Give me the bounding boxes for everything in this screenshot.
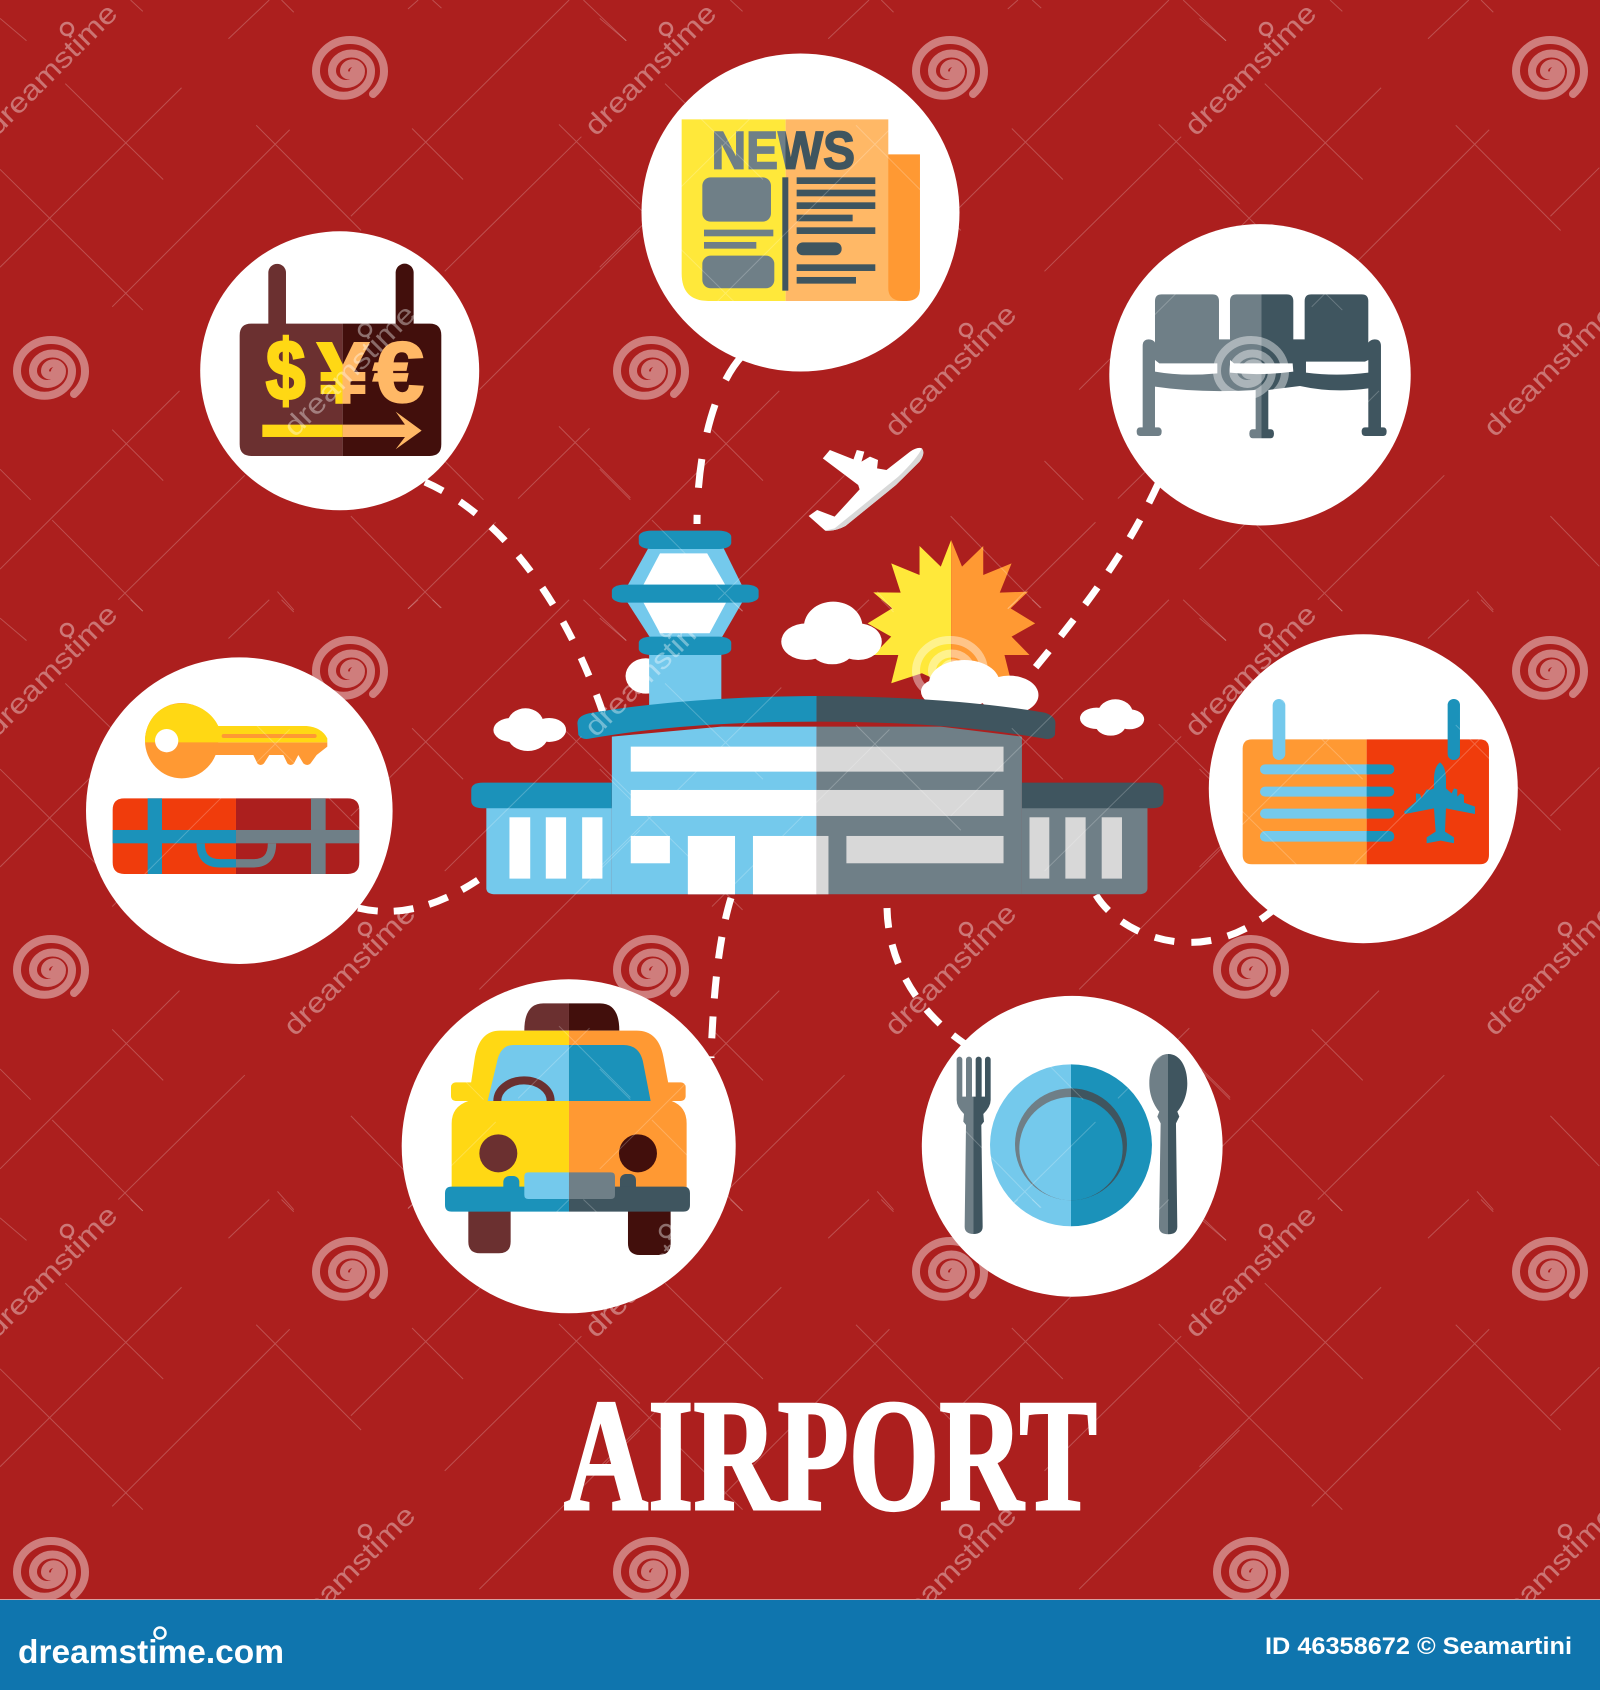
watermark text: dreamstime — [578, 598, 722, 742]
footer logo: dreamstime.com — [18, 1633, 284, 1670]
watermark text: dreamstime — [1178, 1199, 1322, 1343]
icon: plate — [990, 1064, 1152, 1226]
panel: plate and cutlery — [922, 996, 1223, 1297]
icon: fork — [957, 1057, 991, 1234]
watermark text: dreamstime — [1477, 1499, 1600, 1643]
footer credit: ID 46358672 © Seamartini — [1265, 1633, 1572, 1660]
icon: airplane — [809, 448, 923, 531]
watermark text: dreamstime — [277, 897, 421, 1041]
watermark text: dreamstime — [1477, 298, 1600, 442]
panel: currency exchange sign — [200, 231, 479, 510]
icon: suitcase — [113, 798, 359, 874]
currency symbols — [266, 323, 424, 422]
panel: waiting seats — [1109, 224, 1411, 526]
terminal building — [471, 696, 1164, 894]
currency symbols: ¥ — [318, 327, 368, 422]
newspaper heading: NEWS — [712, 121, 855, 180]
icon: clouds — [493, 602, 1144, 751]
footer bar — [0, 1599, 1600, 1690]
watermark text: dreamstime — [878, 897, 1022, 1041]
dashed connectors — [358, 356, 1272, 1058]
watermark text: dreamstime — [1477, 897, 1600, 1041]
watermark text: dreamstime — [878, 1499, 1022, 1643]
currency symbols: $ — [266, 323, 305, 418]
footer logo mark — [154, 1628, 166, 1638]
watermark text: dreamstime — [1178, 598, 1322, 742]
watermark text: dreamstime — [277, 298, 421, 442]
icon: key — [145, 703, 327, 778]
panel: flight information board — [1209, 634, 1518, 943]
watermark text: dreamstime — [878, 298, 1022, 442]
icon: plane on board — [1404, 762, 1475, 843]
icon: sun — [868, 540, 1035, 687]
control tower — [612, 531, 759, 707]
currency symbols: € — [373, 325, 424, 420]
watermark text: dreamstime — [578, 1199, 722, 1343]
watermark text: dreamstime — [578, 0, 722, 141]
watermark text: dreamstime — [1178, 0, 1322, 141]
central airport illustration — [471, 448, 1164, 894]
panel: newspaper — [642, 54, 960, 372]
title: AIRPORT — [564, 1366, 1097, 1544]
icon: spoon — [1149, 1054, 1187, 1234]
panel: key and luggage — [86, 657, 393, 964]
watermark text: dreamstime — [277, 1499, 421, 1643]
panel: taxi — [402, 979, 736, 1313]
